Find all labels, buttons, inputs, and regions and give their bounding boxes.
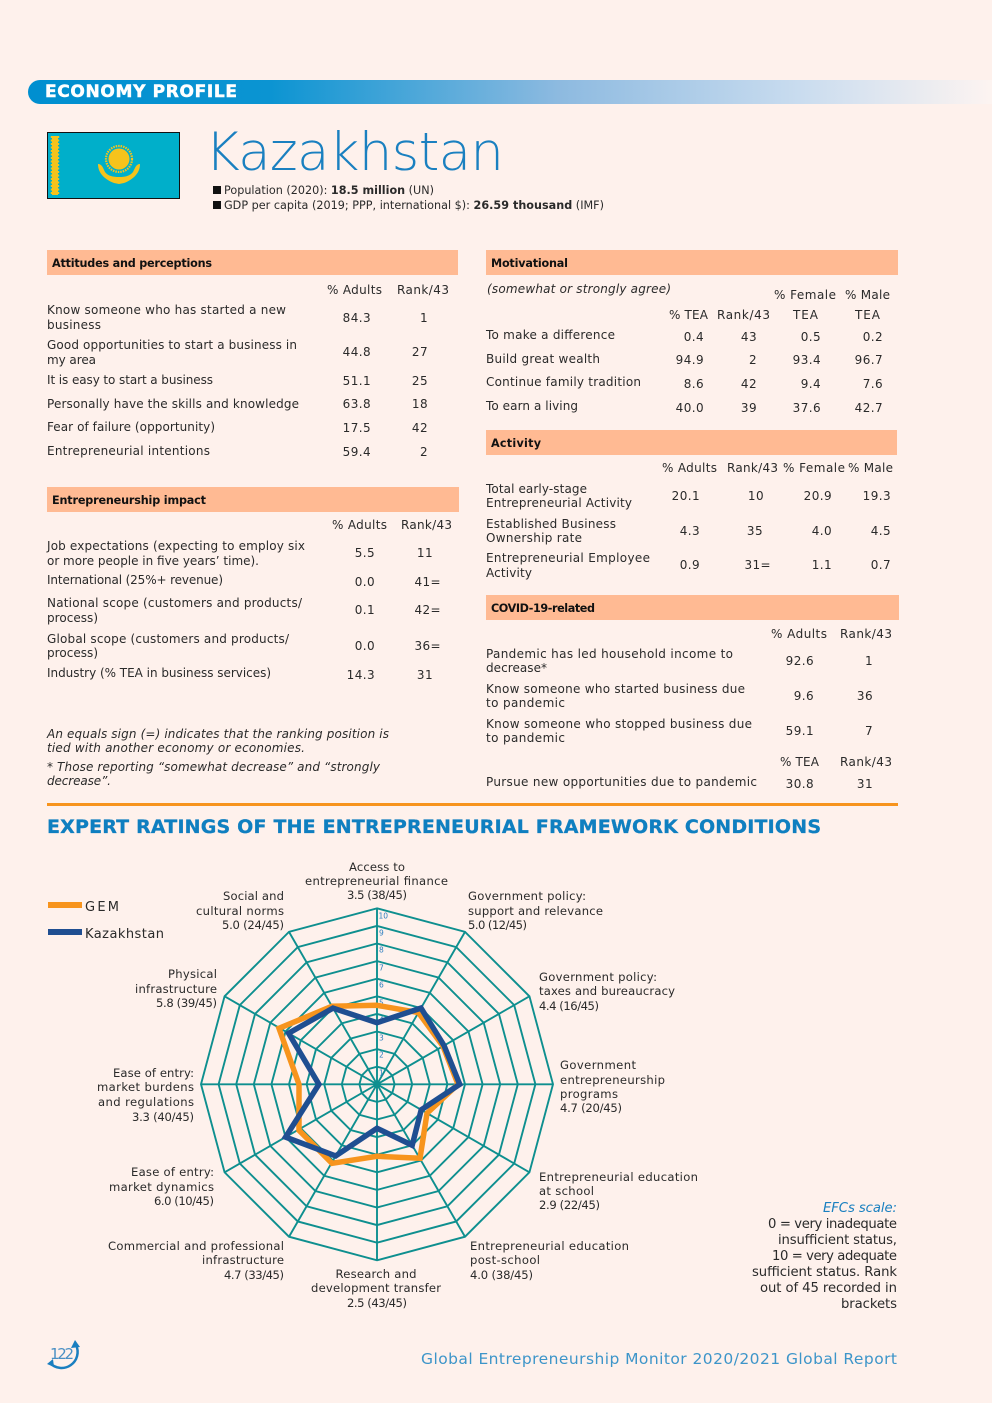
panel: motivational: 93.4: [793, 353, 821, 367]
footnotes: decrease”.: [47, 774, 111, 788]
radar axis labels: Entrepreneurial education: [470, 1239, 629, 1253]
title: Kazakhstan: Kazakhstan: [205, 122, 504, 183]
panel: COVID-19-related: Know someone who stopped business due: [486, 717, 752, 731]
radar axis labels: 6.0 (10/45): [154, 1194, 214, 1208]
panel: activity: 10: [748, 489, 764, 503]
panel: activity: Activity: [486, 566, 532, 580]
panel: entrepreneurship impact: 36=: [414, 639, 441, 653]
panel: activity: 31=: [744, 558, 771, 572]
panel: COVID-19-related: 59.1: [786, 724, 814, 738]
page number: [47, 1340, 80, 1368]
panel: entrepreneurship impact: Entrepreneurship impact: [52, 494, 207, 507]
panel: motivational: 9.4: [801, 377, 821, 391]
panel: motivational: 37.6: [793, 401, 821, 415]
radar axis labels: Commercial and professional: [108, 1239, 284, 1253]
panel: attitudes and perceptions: Entrepreneurial intentions: [47, 444, 210, 458]
panel: attitudes and perceptions: my area: [47, 353, 96, 367]
panel: entrepreneurship impact: 0.0: [355, 575, 375, 589]
panel: activity: Ownership rate: [486, 531, 582, 545]
panel: motivational: % TEA: [669, 308, 709, 322]
radar axis labels: Access to: [349, 860, 405, 874]
radar chart: 8: [379, 945, 384, 954]
panel: motivational: TEA: [854, 308, 881, 322]
panel: attitudes and perceptions: 25: [412, 374, 428, 388]
panel: attitudes and perceptions: Fear of failure (opportunity): [47, 420, 215, 434]
panel: entrepreneurship impact: or more people in five years’ time).: [47, 554, 259, 568]
radar axis labels: entrepreneurial finance: [305, 874, 448, 888]
panel: attitudes and perceptions: 42: [412, 421, 428, 435]
panel: motivational: 39: [741, 401, 757, 415]
panel: COVID-19-related: 30.8: [786, 777, 814, 791]
panel: COVID-19-related: 36: [857, 689, 873, 703]
panel: COVID-19-related: Rank/43: [840, 755, 892, 769]
radar chart: 5: [379, 998, 384, 1007]
panel: COVID-19-related: Pursue new opportunities due to pandemic: [486, 775, 757, 789]
radar axis labels: entrepreneurship: [560, 1073, 665, 1087]
panel: activity: 35: [747, 524, 763, 538]
radar axis labels: development transfer: [311, 1281, 441, 1295]
EFCs scale note: 10 = very adequate: [772, 1249, 897, 1264]
panel: motivational: 43: [741, 330, 757, 344]
panel: activity: 19.3: [863, 489, 891, 503]
panel: motivational: 0.2: [863, 330, 883, 344]
panel: motivational: (somewhat or strongly agree): [487, 282, 671, 296]
panel: entrepreneurship impact: Job expectations (expecting to employ six: [46, 539, 305, 553]
panel: activity: Entrepreneurial Employee: [486, 551, 650, 565]
radar chart: 4: [379, 1015, 384, 1024]
radar axis labels: Ease of entry:: [113, 1066, 194, 1080]
panel: COVID-19-related: to pandemic: [486, 731, 565, 745]
radar axis labels: 4.0 (38/45): [470, 1268, 533, 1282]
chart legend: GEM: [85, 900, 119, 915]
chart legend: Kazakhstan: [85, 927, 164, 942]
panel: motivational: Rank/43: [717, 308, 770, 322]
series: Kazakhstan: [286, 1008, 460, 1156]
footnotes: [46, 727, 389, 788]
series: GEM: [279, 1005, 458, 1163]
radar axis labels: programs: [560, 1087, 618, 1101]
panel: entrepreneurship impact: International (25%+ revenue): [47, 573, 223, 587]
EFCs scale note: EFCs scale:: [823, 1201, 897, 1216]
panel: activity: Rank/43: [727, 461, 778, 475]
panel: motivational: Build great wealth: [486, 352, 600, 366]
panel: motivational: % Female: [774, 288, 836, 302]
panel: entrepreneurship impact: Industry (% TEA in business services): [47, 666, 271, 680]
population and GDP facts: Population (2020): 18.5 million (UN): [224, 184, 434, 197]
panel: attitudes and perceptions: Personally have the skills and knowledge: [47, 397, 299, 411]
panel: motivational: 96.7: [855, 353, 883, 367]
panel: entrepreneurship impact: 0.0: [355, 639, 375, 653]
EFCs scale note: [752, 1201, 897, 1312]
radar axis labels: Government: [560, 1058, 636, 1072]
panel: COVID-19-related: % TEA: [780, 755, 820, 769]
chart legend: [48, 900, 164, 942]
radar axis labels: post-school: [470, 1253, 540, 1267]
panel: activity: Entrepreneurial Activity: [486, 496, 632, 510]
radar axis labels: 3.3 (40/45): [132, 1110, 194, 1124]
panel: entrepreneurship impact: % Adults: [332, 518, 387, 532]
panel: attitudes and perceptions: 1: [420, 311, 428, 325]
panel: attitudes and perceptions: 27: [412, 345, 428, 359]
panel: entrepreneurship impact: Rank/43: [401, 518, 452, 532]
footnotes: * Those reporting “somewhat decrease” and “strongly: [47, 760, 381, 774]
page number: 122: [50, 1345, 74, 1363]
panel: attitudes and perceptions: 44.8: [343, 345, 371, 359]
panel: COVID-19-related: 7: [865, 724, 873, 738]
footer: report name: Global Entrepreneurship Monitor 2020/2021 Global Report: [421, 1350, 897, 1368]
EFCs scale note: 0 = very inadequate: [768, 1217, 897, 1232]
panel: activity: % Male: [848, 461, 893, 475]
radar chart: [201, 908, 553, 1260]
panel: attitudes and perceptions: It is easy to start a business: [47, 373, 213, 387]
icon: flag of Kazakhstan: [48, 132, 180, 198]
panel: motivational: 8.6: [684, 377, 704, 391]
panel: motivational: TEA: [792, 308, 819, 322]
panel: motivational: 7.6: [863, 377, 883, 391]
panel: attitudes and perceptions: Good opportunities to start a business in: [47, 338, 297, 352]
radar chart: 1: [379, 1068, 384, 1077]
radar axis labels: [97, 860, 698, 1310]
radar axis labels: infrastructure: [135, 982, 217, 996]
EFCs scale note: out of 45 recorded in: [760, 1281, 897, 1296]
heading: expert ratings: EXPERT RATINGS OF THE ENTREPRENEURIAL FRAMEWORK CONDITIONS: [47, 816, 821, 838]
panel: activity: % Adults: [662, 461, 717, 475]
panel: COVID-19-related: COVID-19-related: [491, 602, 595, 615]
panel: activity: Established Business: [486, 517, 616, 531]
panel: motivational: 0.4: [684, 330, 704, 344]
panel: motivational: To earn a living: [485, 399, 578, 413]
EFCs scale note: sufficient status. Rank: [752, 1265, 897, 1280]
radar axis labels: 3.5 (38/45): [347, 888, 407, 902]
radar chart: 9: [379, 928, 384, 937]
radar axis labels: 4.7 (33/45): [224, 1268, 284, 1282]
panel: activity: 1.1: [812, 558, 832, 572]
radar axis labels: Social and: [223, 889, 284, 903]
panel: attitudes and perceptions: 63.8: [343, 397, 371, 411]
panel: COVID-19-related: [486, 595, 899, 791]
panel: activity: 4.3: [680, 524, 700, 538]
panel: activity: 4.0: [812, 524, 832, 538]
panel: motivational: [485, 250, 898, 415]
panel: attitudes and perceptions: Rank/43: [397, 283, 449, 297]
EFCs scale note: insufficient status,: [778, 1233, 897, 1248]
panel: activity: [485, 430, 897, 580]
radar chart: 2: [379, 1050, 384, 1059]
panel: motivational: Continue family tradition: [486, 375, 641, 389]
panel: COVID-19-related: decrease*: [486, 661, 547, 675]
radar chart: 6: [379, 980, 384, 989]
radar chart: 3: [379, 1033, 384, 1042]
panel: activity: 20.9: [804, 489, 832, 503]
panel: attitudes and perceptions: 84.3: [343, 311, 371, 325]
radar axis labels: Government policy:: [468, 889, 586, 903]
panel: COVID-19-related: 31: [857, 777, 873, 791]
panel: motivational: 2: [749, 353, 757, 367]
radar axis labels: taxes and bureaucracy: [539, 984, 675, 998]
panel: motivational: Motivational: [491, 257, 568, 270]
radar axis labels: support and relevance: [468, 904, 603, 918]
banner: economy profile: [28, 80, 992, 104]
radar axis labels: Government policy:: [539, 970, 657, 984]
panel: motivational: 94.9: [676, 353, 704, 367]
panel: attitudes and perceptions: business: [47, 318, 101, 332]
panel: COVID-19-related: Know someone who started business due: [486, 682, 745, 696]
panel: motivational: 42.7: [855, 401, 883, 415]
radar axis labels: Ease of entry:: [131, 1165, 214, 1179]
panel: attitudes and perceptions: % Adults: [327, 283, 382, 297]
panel: COVID-19-related: to pandemic: [486, 696, 565, 710]
panel: attitudes and perceptions: Know someone who has started a new: [47, 303, 286, 317]
radar axis labels: 4.4 (16/45): [539, 999, 599, 1013]
radar axis labels: 4.7 (20/45): [560, 1101, 622, 1115]
panel: entrepreneurship impact: 42=: [414, 603, 441, 617]
radar axis labels: 5.8 (39/45): [156, 996, 217, 1010]
radar axis labels: at school: [539, 1184, 594, 1198]
panel: activity: 0.9: [680, 558, 700, 572]
panel: entrepreneurship impact: 5.5: [355, 546, 375, 560]
panel: COVID-19-related: Pandemic has led household income to: [486, 647, 733, 661]
panel: attitudes and perceptions: 51.1: [343, 374, 371, 388]
panel: COVID-19-related: % Adults: [771, 627, 827, 641]
panel: attitudes and perceptions: Attitudes and perceptions: [52, 257, 212, 270]
radar axis labels: and regulations: [98, 1095, 194, 1109]
radar chart: 10: [378, 911, 388, 920]
panel: attitudes and perceptions: 18: [412, 397, 428, 411]
population and GDP facts: [213, 184, 604, 212]
radar axis labels: 5.0 (24/45): [222, 918, 284, 932]
panel: motivational: % Male: [845, 288, 890, 302]
radar axis labels: market dynamics: [109, 1180, 214, 1194]
panel: entrepreneurship impact: [46, 487, 459, 682]
banner: economy profile: ECONOMY PROFILE: [45, 82, 237, 102]
panel: motivational: 0.5: [801, 330, 821, 344]
radar axis labels: Research and: [336, 1267, 416, 1281]
panel: activity: 20.1: [672, 489, 700, 503]
panel: activity: % Female: [783, 461, 845, 475]
radar axis labels: 5.0 (12/45): [468, 918, 527, 932]
panel: COVID-19-related: 92.6: [786, 654, 814, 668]
radar axis labels: 2.5 (43/45): [347, 1296, 407, 1310]
panel: COVID-19-related: 1: [865, 654, 873, 668]
panel: entrepreneurship impact: 0.1: [355, 603, 375, 617]
panel: activity: Total early-stage: [485, 482, 587, 496]
radar axis labels: Physical: [168, 967, 217, 981]
panel: activity: Activity: [491, 437, 542, 450]
radar axis labels: infrastructure: [202, 1253, 284, 1267]
radar axis labels: cultural norms: [196, 904, 284, 918]
panel: attitudes and perceptions: 59.4: [343, 445, 371, 459]
panel: attitudes and perceptions: 2: [420, 445, 428, 459]
panel: entrepreneurship impact: 41=: [414, 575, 441, 589]
radar axis labels: Entrepreneurial education: [539, 1170, 698, 1184]
panel: COVID-19-related: Rank/43: [840, 627, 892, 641]
radar axis labels: 2.9 (22/45): [539, 1198, 600, 1212]
EFCs scale note: brackets: [841, 1297, 897, 1312]
panel: COVID-19-related: 9.6: [794, 689, 814, 703]
panel: attitudes and perceptions: [47, 250, 458, 459]
radar chart: 7: [379, 963, 384, 972]
radar axis labels: market burdens: [97, 1080, 194, 1094]
panel: attitudes and perceptions: 17.5: [343, 421, 371, 435]
population and GDP facts: GDP per capita (2019; PPP, international $): 26.59 thousand (IMF): [224, 199, 604, 212]
panel: entrepreneurship impact: 11: [417, 546, 433, 560]
panel: motivational: 40.0: [676, 401, 704, 415]
panel: entrepreneurship impact: process): [47, 611, 98, 625]
footnotes: tied with another economy or economies.: [47, 741, 305, 755]
panel: motivational: To make a difference: [485, 328, 615, 342]
panel: motivational: 42: [741, 377, 757, 391]
panel: entrepreneurship impact: Global scope (customers and products/: [47, 632, 290, 646]
panel: entrepreneurship impact: National scope (customers and products/: [47, 596, 303, 610]
panel: entrepreneurship impact: 14.3: [347, 668, 375, 682]
footnotes: An equals sign (=) indicates that the ranking position is: [46, 727, 389, 741]
panel: entrepreneurship impact: 31: [417, 668, 433, 682]
panel: entrepreneurship impact: process): [47, 646, 98, 660]
panel: activity: 4.5: [871, 524, 891, 538]
panel: activity: 0.7: [871, 558, 891, 572]
